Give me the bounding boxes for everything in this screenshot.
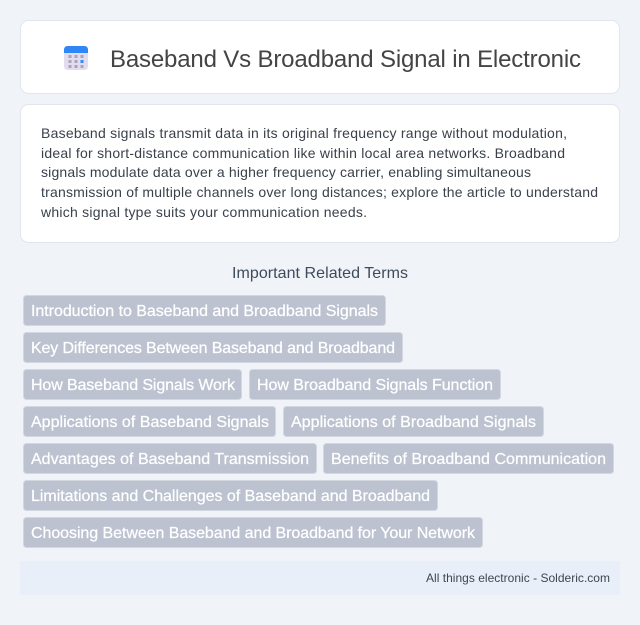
title: Baseband Vs Broadband Signal in Electronic (110, 46, 581, 73)
tag: broadband applications: Applications of Broadband Signals (291, 414, 536, 431)
tag: broadband benefits: Benefits of Broadband Communication (331, 451, 606, 468)
tag: introduction (24, 296, 386, 326)
icon: calendar grid (64, 46, 88, 70)
tag: baseband advantages: Advantages of Baseband Transmission (31, 451, 309, 468)
tag: introduction: Introduction to Baseband and Broadband Signals (31, 303, 378, 320)
text block: summary: ideal for short-distance communication like within local area networks. Broadband (41, 145, 565, 161)
text block: summary: Baseband signals transmit data in its original frequency range without modulation, (41, 125, 567, 141)
tag: key differences: Key Differences Between Baseband and Broadband (31, 340, 395, 357)
tag: limitations: Limitations and Challenges of Baseband and Broadband (31, 488, 430, 505)
tag: broadband function (250, 370, 500, 400)
footer (20, 561, 620, 595)
tag: baseband work: How Baseband Signals Work (31, 377, 236, 394)
text block: summary: transmission of multiple channels over long distances; explore the article to understand (41, 184, 598, 200)
tag: baseband applications (24, 406, 276, 436)
text block: summary: signals modulate data over a higher frequency carrier, enabling simultaneous (41, 164, 531, 180)
panel: header card (20, 20, 620, 94)
tag: baseband applications: Applications of Baseband Signals (31, 414, 269, 431)
tag: broadband benefits (324, 444, 614, 474)
heading: related terms: Important Related Terms (232, 265, 408, 282)
footer: All things electronic - Solderic.com (426, 571, 610, 585)
tag: baseband work (24, 370, 242, 400)
tag: key differences (24, 332, 402, 362)
tag: broadband applications (284, 406, 544, 436)
panel: summary card (20, 104, 620, 242)
tag: broadband function: How Broadband Signals Function (257, 377, 493, 394)
tag: choosing (24, 518, 482, 548)
panel: related term tags (24, 296, 614, 548)
tag: limitations (24, 480, 438, 510)
tag: choosing: Choosing Between Baseband and Broadband for Your Network (31, 525, 476, 542)
tag: baseband advantages (24, 444, 316, 474)
text block: summary (40, 125, 598, 220)
text block: summary: which signal type suits your communication needs. (40, 204, 367, 220)
